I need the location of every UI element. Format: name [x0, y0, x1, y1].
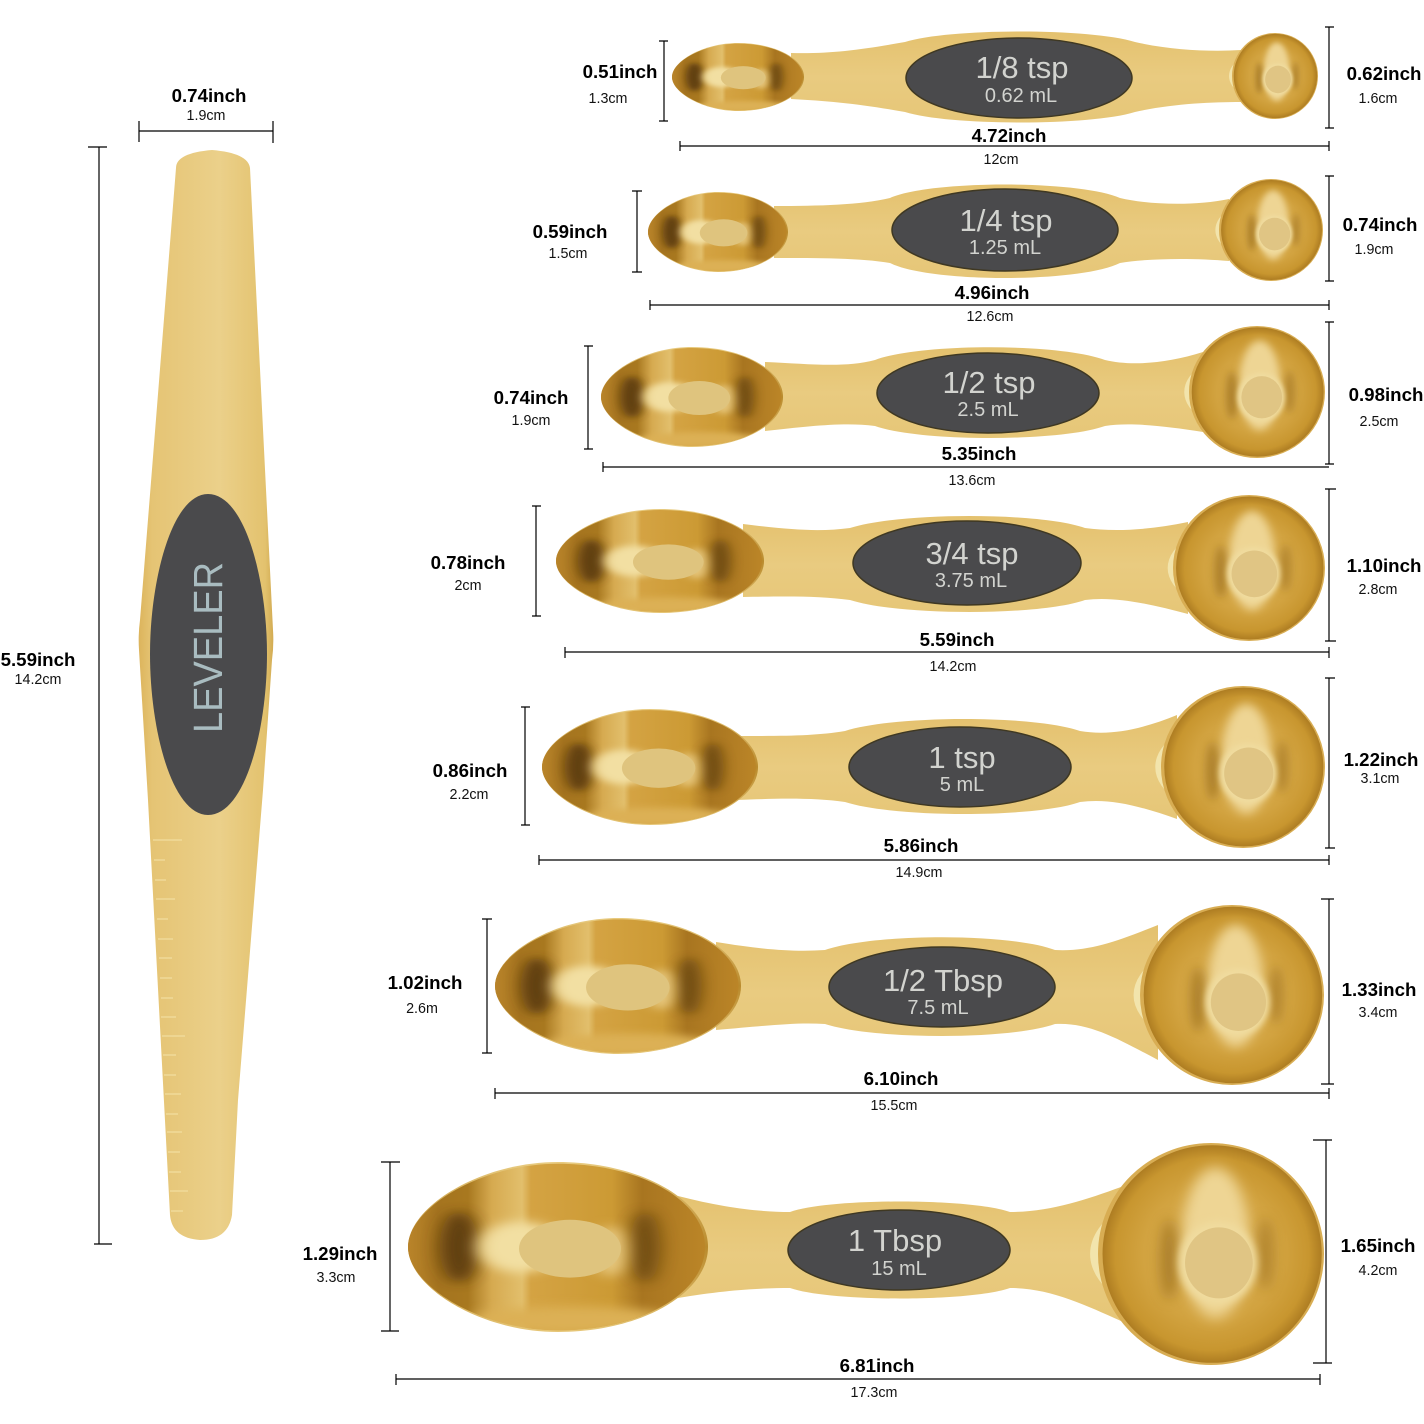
dimensions: 1/4 tsp: [533, 176, 1417, 325]
dimensions: 1 tsp: 0.86inch: [433, 760, 507, 781]
dimensions: 1/8 tsp: 0.51inch: [583, 61, 657, 82]
dimensions: 1 Tbsp: 1.65inch: [1341, 1235, 1415, 1256]
dimensions: 1/2 Tbsp: 15.5cm: [871, 1098, 917, 1114]
dimensions: 1/2 tsp: [494, 322, 1423, 489]
dimensions: 1/4 tsp: 12.6cm: [967, 309, 1013, 325]
dimensions: 1 tsp: 1.22inch: [1344, 749, 1418, 770]
dimensions: 3/4 tsp: 2.8cm: [1359, 582, 1397, 598]
spoon: 1/8 tsp: [672, 32, 1318, 122]
dimensions: 1/8 tsp: 0.62inch: [1347, 63, 1421, 84]
dimensions: 1 Tbsp: 4.2cm: [1359, 1263, 1397, 1279]
grip label: 3.75 mL: [935, 570, 1007, 592]
large bowl: [1134, 905, 1324, 1085]
small bowl: [672, 43, 804, 112]
large bowl: [1184, 326, 1325, 458]
leveler ruler marks: [153, 840, 188, 1211]
dimensions: 1/2 Tbsp: 1.02inch: [388, 972, 462, 993]
grip label: 1/4 tsp: [959, 203, 1053, 238]
large bowl: [1229, 33, 1318, 119]
large bowl: [1215, 179, 1323, 281]
dimensions: 1 tsp: 3.1cm: [1361, 771, 1399, 787]
dimensions: 1/2 tsp: 0.98inch: [1349, 384, 1423, 405]
grip label: 1/2 tsp: [942, 365, 1036, 400]
handle: [716, 925, 1158, 1060]
grip label: 3/4 tsp: [925, 536, 1019, 571]
small bowl: [556, 509, 764, 614]
grip label: [853, 521, 1081, 605]
handle: [765, 347, 1203, 438]
large bowl: [1090, 1143, 1324, 1365]
dimensions: 1 Tbsp: [303, 1140, 1415, 1401]
leveler text: LEVELER: [185, 562, 231, 733]
dimensions: 3/4 tsp: 5.59inch: [920, 629, 994, 650]
dimensions: 3/4 tsp: 1.10inch: [1347, 555, 1421, 576]
grip label: 0.62 mL: [985, 85, 1057, 107]
dimensions: 1/2 tsp: 13.6cm: [949, 473, 995, 489]
leveler dimensions: 1.9cm: [187, 108, 225, 124]
large bowl: [1155, 686, 1325, 848]
dimensions: 1/2 Tbsp: 6.10inch: [864, 1068, 938, 1089]
dimensions: 1/4 tsp: 0.59inch: [533, 221, 607, 242]
spoon: 1/4 tsp: [648, 179, 1323, 281]
dimensions: 1 Tbsp: 1.29inch: [303, 1243, 377, 1264]
dimensions: 1/2 tsp: 1.9cm: [512, 413, 550, 429]
large bowl: [1168, 495, 1325, 641]
spoon: 1 Tbsp: [408, 1143, 1324, 1365]
leveler dimensions: 5.59inch: [1, 649, 75, 670]
spoon: 3/4 tsp: [556, 495, 1325, 641]
dimensions: 1/2 tsp: 5.35inch: [942, 443, 1016, 464]
dimensions: 1 Tbsp: 6.81inch: [840, 1355, 914, 1376]
dimensions: 1/2 Tbsp: 1.33inch: [1342, 979, 1416, 1000]
grip label: 5 mL: [940, 774, 984, 796]
handle: [774, 184, 1229, 278]
grip label: [892, 189, 1118, 271]
grip label: [849, 727, 1071, 807]
dimensions: 1 Tbsp: 17.3cm: [851, 1385, 897, 1401]
grip label: 7.5 mL: [907, 997, 969, 1019]
grip label: [877, 353, 1099, 433]
small bowl: [648, 192, 788, 273]
grip label: [788, 1210, 1010, 1290]
grip label: 1 Tbsp: [848, 1223, 942, 1258]
dimensions: 3/4 tsp: [431, 489, 1421, 675]
dimensions: 1/4 tsp: 4.96inch: [955, 282, 1029, 303]
dimensions: 1/8 tsp: [583, 27, 1421, 168]
dimensions: 3/4 tsp: 0.78inch: [431, 552, 505, 573]
leveler dimensions: [1, 85, 273, 1244]
dimensions: 1 tsp: 14.9cm: [896, 865, 942, 881]
grip label: 2.5 mL: [957, 399, 1019, 421]
handle: [791, 32, 1241, 122]
dimensions: 3/4 tsp: 2cm: [454, 578, 482, 594]
dimensions: 1 tsp: 5.86inch: [884, 835, 958, 856]
small bowl: [408, 1162, 708, 1334]
dimensions: 1/4 tsp: 1.5cm: [549, 246, 587, 262]
grip label: 1 tsp: [928, 740, 996, 775]
grip label: 1/8 tsp: [975, 50, 1069, 85]
spoon: 1 tsp: [542, 686, 1325, 848]
grip label: 1.25 mL: [969, 237, 1041, 259]
dimensions: 1 Tbsp: 3.3cm: [317, 1270, 355, 1286]
small bowl: [542, 709, 758, 826]
dimensions: 3/4 tsp: 14.2cm: [930, 659, 976, 675]
dimensions: 1/8 tsp: 1.6cm: [1359, 91, 1397, 107]
grip label: [829, 947, 1055, 1027]
handle: [743, 516, 1188, 614]
small bowl: [601, 347, 783, 448]
small bowl: [495, 918, 741, 1055]
leveler dimensions: 14.2cm: [15, 672, 61, 688]
dimensions: 1 tsp: 2.2cm: [450, 787, 488, 803]
dimensions: 1/4 tsp: 1.9cm: [1355, 242, 1393, 258]
handle: [678, 1187, 1121, 1321]
dimensions: 1/4 tsp: 0.74inch: [1343, 214, 1417, 235]
dimensions: 1/2 Tbsp: [388, 899, 1416, 1114]
dimensions: 1/2 Tbsp: 3.4cm: [1359, 1005, 1397, 1021]
leveler: [139, 150, 273, 1240]
leveler dimensions: 0.74inch: [172, 85, 246, 106]
grip label: 15 mL: [871, 1258, 927, 1280]
dimensions: 1/8 tsp: 12cm: [984, 152, 1018, 168]
leveler black grip: [150, 494, 267, 815]
grip label: 1/2 Tbsp: [883, 963, 1003, 998]
spoon: 1/2 Tbsp: [495, 905, 1324, 1085]
spoon: 1/2 tsp: [601, 326, 1325, 458]
leveler body: [139, 150, 273, 1240]
grip label: [906, 38, 1132, 118]
dimensions: 1/2 tsp: 0.74inch: [494, 387, 568, 408]
dimensions: 1/2 tsp: 2.5cm: [1360, 414, 1398, 430]
dimensions: 1/8 tsp: 1.3cm: [589, 91, 627, 107]
dimensions: 1 tsp: [433, 678, 1418, 881]
dimensions: 1/8 tsp: 4.72inch: [972, 125, 1046, 146]
handle: [736, 715, 1177, 819]
dimensions: 1/2 Tbsp: 2.6m: [406, 1001, 438, 1017]
